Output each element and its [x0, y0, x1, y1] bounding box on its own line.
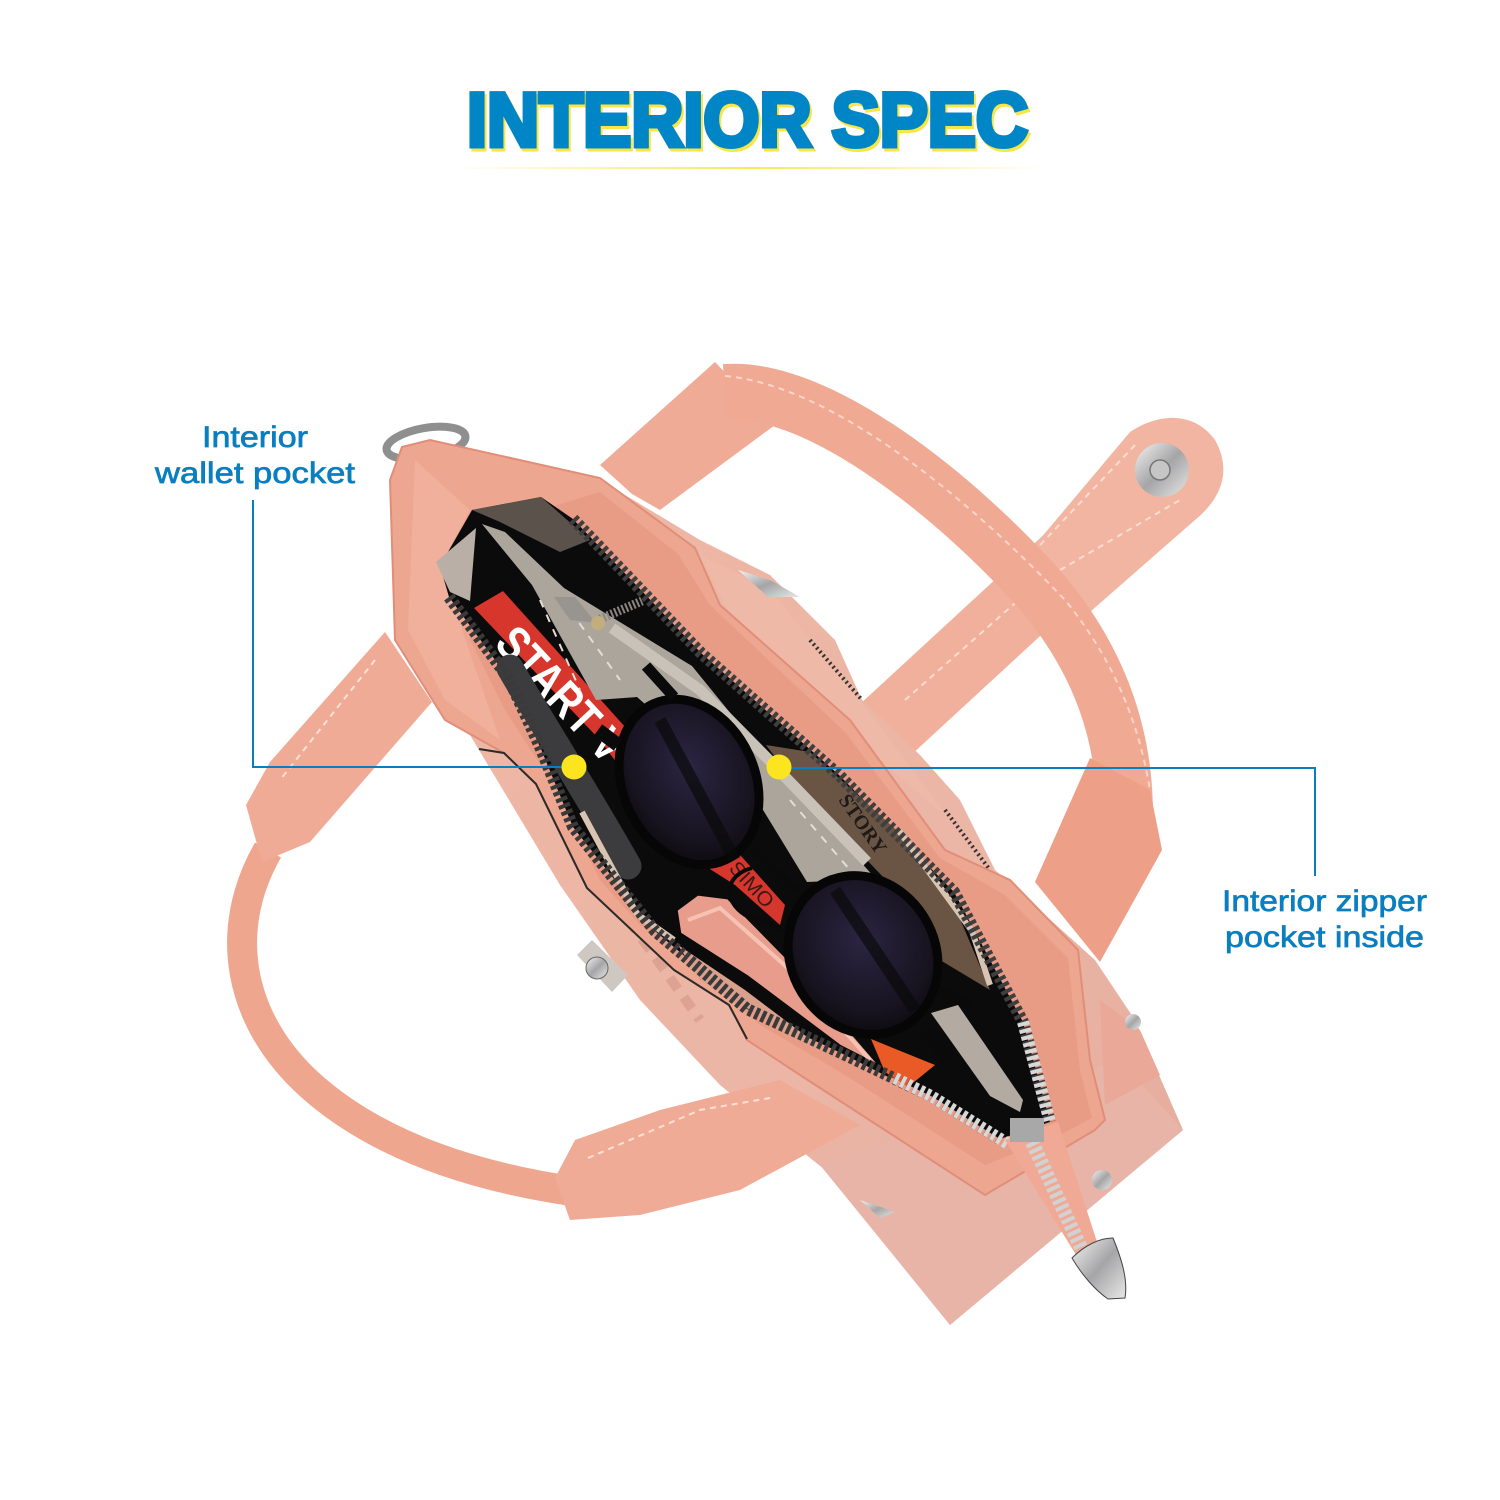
red book with title: SIMO: [724, 857, 778, 913]
callout: interior wallet pocket: [154, 421, 586, 780]
interior cavity: [436, 497, 1050, 1139]
title: INTERIOR SPEC: INTERIOR SPEC: [467, 78, 1028, 163]
tan book: STORY: [834, 790, 891, 859]
label: interior wallet pocket: [154, 421, 356, 490]
marker dot: zipper pocket: [766, 754, 792, 780]
phone: [510, 668, 628, 866]
label: interior wallet pocket: wallet pocket: [154, 457, 356, 490]
red book with title: [474, 591, 785, 925]
shoulder strap ring: [384, 421, 468, 465]
handbag illustration: [242, 362, 1223, 1325]
metal hardware: [577, 570, 1141, 1218]
front handle loop: [242, 632, 860, 1220]
red book with title: START V: [485, 616, 636, 773]
leader line: wallet pocket: [253, 500, 575, 767]
label: interior zipper pocket inside: pocket inside: [1225, 921, 1424, 954]
second grey pocket: [931, 1005, 1023, 1112]
tan book: [766, 745, 990, 990]
label: interior wallet pocket: Interior: [202, 421, 308, 454]
title: INTERIOR SPEC: INTERIOR SPEC: [469, 81, 1030, 166]
grey zipper pocket: [482, 524, 876, 882]
zipper lining edges: [582, 812, 990, 985]
bag body: [430, 480, 1183, 1325]
label: interior zipper pocket inside: [1222, 885, 1427, 954]
zipper pull: [1005, 1118, 1126, 1299]
marker dot: wallet pocket: [562, 754, 586, 780]
back handle loop: [600, 362, 1162, 962]
orange card: [871, 1039, 935, 1087]
callout: interior zipper pocket: [766, 754, 1427, 954]
label: interior zipper pocket inside: Interior zipper: [1222, 885, 1427, 918]
zippers: [449, 519, 1050, 1145]
back handle strap with snap tab: [885, 418, 1223, 730]
bag rim: [390, 440, 1105, 1195]
leader line: zipper pocket: [780, 768, 1315, 876]
pink wallet: [674, 892, 890, 1074]
sunglasses: [593, 666, 972, 1063]
